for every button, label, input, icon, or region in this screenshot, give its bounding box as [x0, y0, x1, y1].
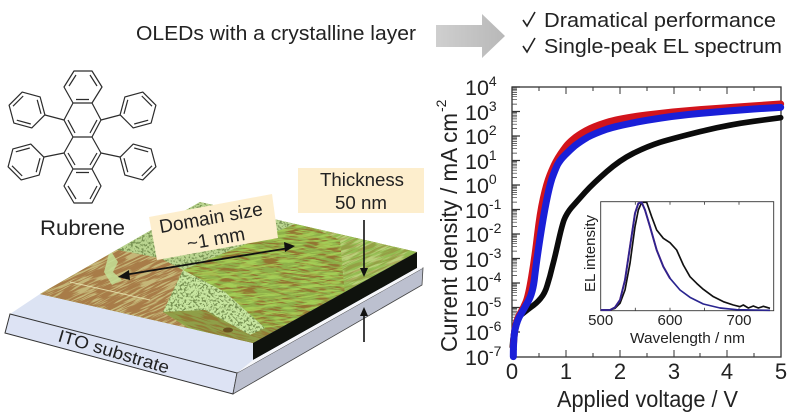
phenyl ring top left: [9, 92, 45, 128]
device illustration: ITO substrate with crystalline film: [4, 202, 424, 395]
icon: check mark 1: [523, 12, 535, 26]
y axis tick labels: -1: [489, 196, 502, 212]
y axis tick labels: -2: [489, 220, 502, 236]
icon: check mark 2: [523, 38, 535, 52]
x axis tick labels: 0: [506, 359, 518, 384]
x axis tick labels: 4: [721, 359, 733, 384]
J-V chart: [433, 73, 787, 412]
pale grain boundary: [70, 282, 150, 300]
phenyl substituent bonds: [44, 115, 120, 157]
inset x tick labels: 500: [588, 312, 613, 329]
y axis tick labels: 0: [489, 171, 497, 187]
y axis tick labels: 10: [465, 174, 489, 198]
headline: OLEDs with a crystalline layer: OLEDs with a crystalline layer: [136, 23, 416, 45]
inset x tick labels: 700: [726, 312, 752, 329]
inset x tick labels: [588, 312, 752, 329]
y axis tick labels: -4: [489, 269, 502, 285]
y axis tick labels: 10: [465, 346, 489, 370]
phenyl ring bottom right: [120, 144, 156, 180]
substrate top face: [10, 268, 423, 373]
y axis title: -2: [433, 99, 449, 112]
inset x axis title: Wavelength / nm: [630, 331, 745, 347]
film cross-section (black edge): [253, 252, 417, 360]
y axis tick labels: 10: [465, 272, 489, 296]
curves: [512, 104, 781, 357]
callout: domain size: [149, 194, 278, 260]
inset: EL spectrum: [583, 202, 774, 347]
y axis tick labels: 2: [489, 122, 497, 138]
y axis tick labels: [465, 73, 502, 370]
phenyl ring bottom left: [8, 144, 44, 180]
y axis tick labels: 10: [465, 223, 489, 247]
y axis tick labels: 10: [465, 150, 489, 174]
inset frame: [601, 202, 774, 311]
pit on film: [223, 328, 233, 332]
result: single-peak EL spectrum: Single-peak EL spectrum: [544, 36, 782, 58]
y axis tick labels: 4: [489, 73, 497, 89]
arrows: thickness indicators: [360, 220, 368, 342]
callout: thickness: 50 nm: [335, 193, 387, 213]
curve: red device: [513, 104, 781, 347]
phenyl ring top right: [120, 92, 156, 128]
result: dramatical performance: Dramatical performance: [544, 10, 776, 32]
inset y axis title: EL intensity: [583, 214, 599, 292]
tetracene core rings: [64, 71, 102, 203]
pale crystal domain near arrow tip: [104, 250, 122, 285]
inset x tick labels: 600: [657, 312, 683, 329]
y axis tick labels: 10: [465, 76, 489, 100]
crystalline film surface: [40, 202, 417, 343]
x axis title: Applied voltage / V: [557, 386, 739, 412]
y axis tick labels: 10: [465, 297, 489, 321]
x axis tick labels: 5: [775, 359, 787, 384]
inset ticks: [635, 202, 739, 311]
results checklist: [523, 10, 782, 58]
x axis tick labels: [506, 359, 787, 384]
y axis tick labels: 10: [465, 321, 489, 345]
inset spectra: [601, 202, 770, 310]
arrow: grey block arrow: [436, 14, 505, 58]
label: Rubrene: Rubrene: [40, 217, 125, 240]
rubrene molecular structure: [8, 71, 156, 203]
curve: blue device: [513, 107, 781, 357]
substrate front face: [5, 314, 237, 394]
callout: thickness: Thickness: [320, 170, 404, 190]
spectrum: black device: [601, 202, 770, 310]
y axis tick labels: 1: [489, 147, 497, 163]
y axis tick labels: 10: [465, 101, 489, 125]
arrow: domain size span: [118, 242, 295, 280]
plot frame and ticks: [512, 87, 781, 357]
x axis tick labels: 1: [560, 359, 572, 384]
y axis tick labels: 10: [465, 248, 489, 272]
spectrum: blue device: [601, 202, 770, 310]
curve: black device: [512, 118, 781, 347]
white gap strip: [237, 268, 423, 373]
y axis tick labels: 10: [465, 199, 489, 223]
y axis tick labels: 3: [489, 98, 497, 114]
y axis tick labels: 10: [465, 125, 489, 149]
callout: thickness: [298, 168, 424, 213]
label: ITO substrate: ITO substrate: [56, 326, 172, 377]
spectrum: purple device: [601, 202, 670, 310]
x axis tick labels: 2: [614, 359, 626, 384]
y axis title: Current density / mA cm: [436, 113, 462, 352]
x axis tick labels: 3: [668, 359, 680, 384]
y axis tick labels: -7: [489, 343, 502, 359]
callout: domain size: Domain size: [158, 199, 264, 238]
y axis tick labels: -5: [489, 294, 502, 310]
y axis tick labels: -3: [489, 245, 502, 261]
callout: domain size: ~1 mm: [185, 224, 247, 255]
substrate side face: [233, 268, 423, 394]
y axis tick labels: -6: [489, 318, 502, 334]
